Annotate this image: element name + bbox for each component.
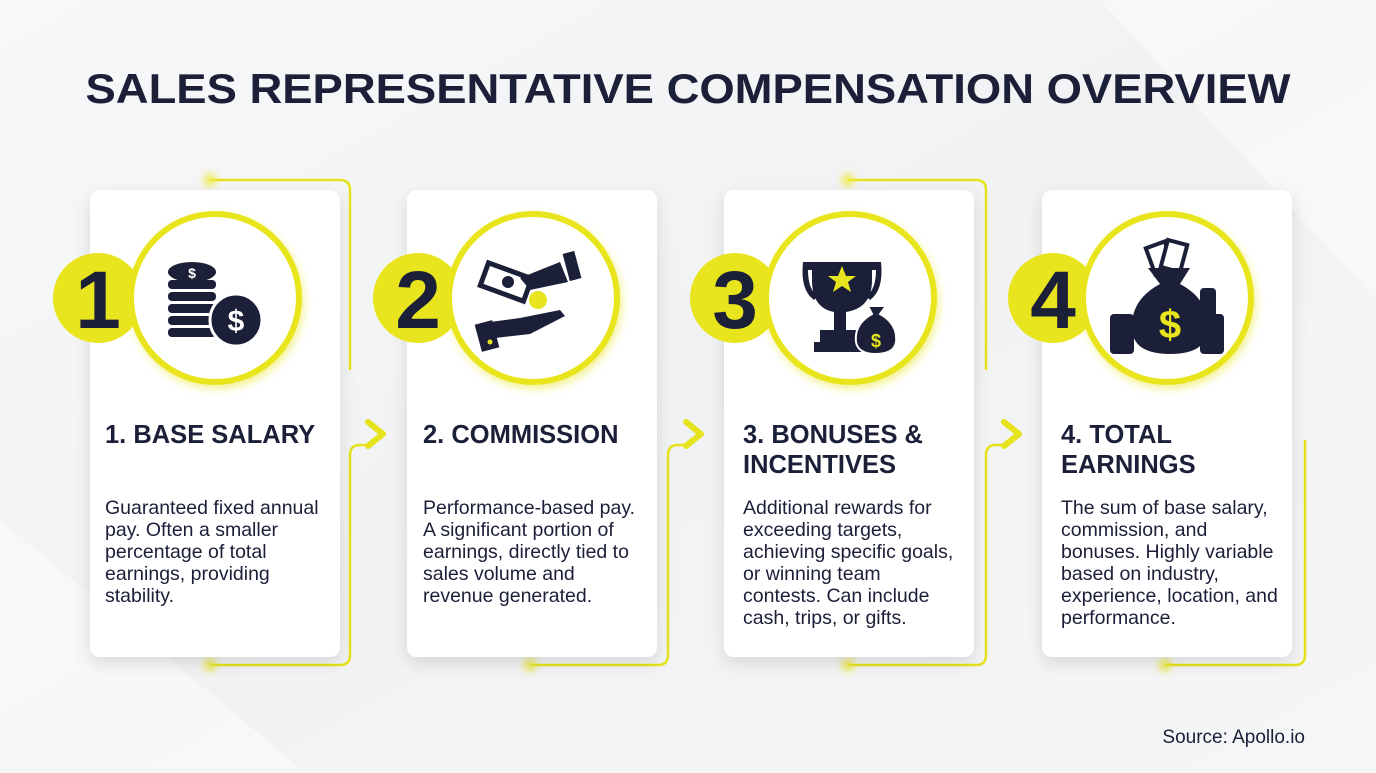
panel: base salary: 1 (75, 255, 121, 346)
panel: base salary: 1. BASE SALARY (105, 421, 315, 449)
panel: total earnings: 4. TOTAL (1061, 421, 1172, 449)
panel: base salary: percentage of total (105, 541, 267, 563)
icon: coin stack: $ (188, 265, 196, 281)
panel: total earnings: experience, location, and (1061, 585, 1278, 607)
panel: commission: 2. COMMISSION (423, 421, 619, 449)
source: Source: Apollo.io (1162, 727, 1305, 748)
panel: base salary: earnings, providing (105, 563, 270, 585)
icon: money bag with coins: $ (1159, 303, 1181, 347)
title: SALES REPRESENTATIVE COMPENSATION OVERVIEW (86, 65, 1291, 112)
panel: commission: 2 (395, 255, 441, 346)
panel: total earnings: bonuses. Highly variable (1061, 541, 1273, 563)
panel: base salary: Guaranteed fixed annual (105, 497, 319, 519)
panel: bonuses: or winning team (743, 563, 881, 585)
panel: commission: A significant portion of (423, 519, 614, 541)
icon: trophy with money bag: $ (871, 331, 881, 351)
panel: bonuses: exceeding targets, (743, 519, 902, 541)
panel: total earnings: commission, and (1061, 519, 1207, 541)
icon: trophy with money bag (802, 262, 896, 354)
panel: base salary: stability. (105, 585, 174, 607)
panel: commission: earnings, directly tied to (423, 541, 629, 563)
icon: hands exchanging money (475, 251, 581, 352)
panel: base salary: pay. Often a smaller (105, 519, 279, 541)
connector lines (210, 180, 1305, 665)
panel: bonuses: 3 (712, 255, 758, 346)
panel: commission: sales volume and (423, 563, 575, 585)
panel: bonuses: contests. Can include (743, 585, 929, 607)
panel: commission: revenue generated. (423, 585, 592, 607)
panel: bonuses: achieving specific goals, (743, 541, 953, 563)
panel: commission: Performance-based pay. (423, 497, 635, 519)
panel: commission (373, 190, 657, 657)
icon: coin stack: $ (228, 305, 245, 338)
panel: total earnings: 4 (1030, 255, 1076, 346)
panel: bonuses (690, 190, 974, 657)
panel: total earnings: The sum of base salary, (1061, 497, 1268, 519)
panel: total earnings: EARNINGS (1061, 451, 1196, 479)
arrows (368, 422, 1019, 446)
panel: total earnings (1008, 190, 1292, 657)
panel: bonuses: INCENTIVES (743, 451, 896, 479)
icon: coin stack (168, 262, 262, 346)
panel: bonuses: 3. BONUSES & (743, 421, 923, 449)
panel: total earnings: based on industry, (1061, 563, 1219, 585)
icon: money bag with coins (1110, 240, 1224, 354)
panel: base salary (53, 190, 340, 657)
panel: total earnings: performance. (1061, 607, 1176, 629)
panel: bonuses: cash, trips, or gifts. (743, 607, 907, 629)
panel: bonuses: Additional rewards for (743, 497, 932, 519)
